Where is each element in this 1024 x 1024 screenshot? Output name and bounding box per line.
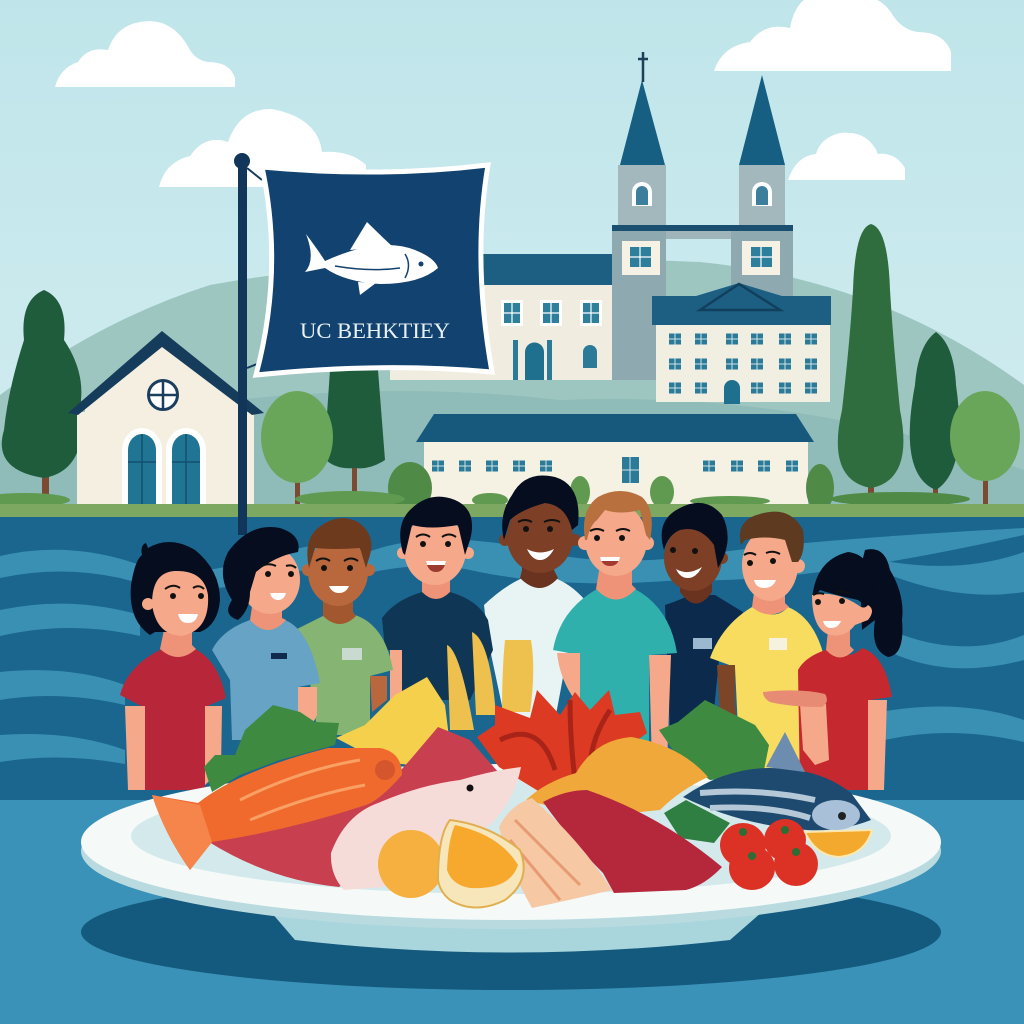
plate shadow xyxy=(81,874,941,990)
lettuce leaf right xyxy=(664,800,730,843)
student 2 xyxy=(212,527,320,740)
hill xyxy=(0,259,1024,510)
meat xyxy=(543,790,722,893)
tomatoes xyxy=(720,819,818,890)
water, front xyxy=(0,800,1024,1024)
student 8 xyxy=(710,512,825,770)
building: long hall xyxy=(416,414,814,506)
building: twin towers xyxy=(612,52,793,380)
student 1 xyxy=(120,542,226,790)
seafood xyxy=(152,632,872,908)
student 5 xyxy=(484,475,585,720)
icon: fish xyxy=(305,222,438,295)
flagpole xyxy=(234,153,250,535)
pink fish xyxy=(209,727,499,887)
orange fish xyxy=(152,748,402,870)
flag label: UC BEHKTIEY xyxy=(300,318,450,343)
coral crab xyxy=(477,690,647,797)
student 6 xyxy=(553,491,677,765)
student 4 xyxy=(382,497,493,700)
orange squash xyxy=(526,737,708,812)
trees, background left xyxy=(2,290,385,504)
plate xyxy=(81,764,941,952)
scallop shell xyxy=(499,798,612,908)
shrubs xyxy=(0,462,970,514)
corn sticks xyxy=(447,632,533,730)
citrus xyxy=(378,830,444,898)
grass bank xyxy=(0,504,1024,518)
pineapple xyxy=(336,677,450,765)
student 9 xyxy=(763,549,902,790)
lemon wedge xyxy=(805,830,872,857)
flag banner xyxy=(256,165,492,375)
waves xyxy=(0,528,1024,764)
students xyxy=(120,475,902,790)
building: right wing xyxy=(652,283,831,404)
lettuce, right xyxy=(659,700,769,780)
mackerel xyxy=(683,732,871,830)
clouds xyxy=(55,0,951,187)
church building on hill xyxy=(390,52,831,404)
white fish xyxy=(331,767,521,890)
building: left wing xyxy=(390,254,615,380)
water, back xyxy=(0,517,1024,807)
flag xyxy=(234,153,492,535)
sky xyxy=(0,0,1024,520)
trees, background right xyxy=(838,224,1020,504)
lettuce, left xyxy=(204,705,339,792)
student 3 xyxy=(295,518,393,735)
house, left xyxy=(68,331,264,506)
student 7 xyxy=(662,503,743,730)
